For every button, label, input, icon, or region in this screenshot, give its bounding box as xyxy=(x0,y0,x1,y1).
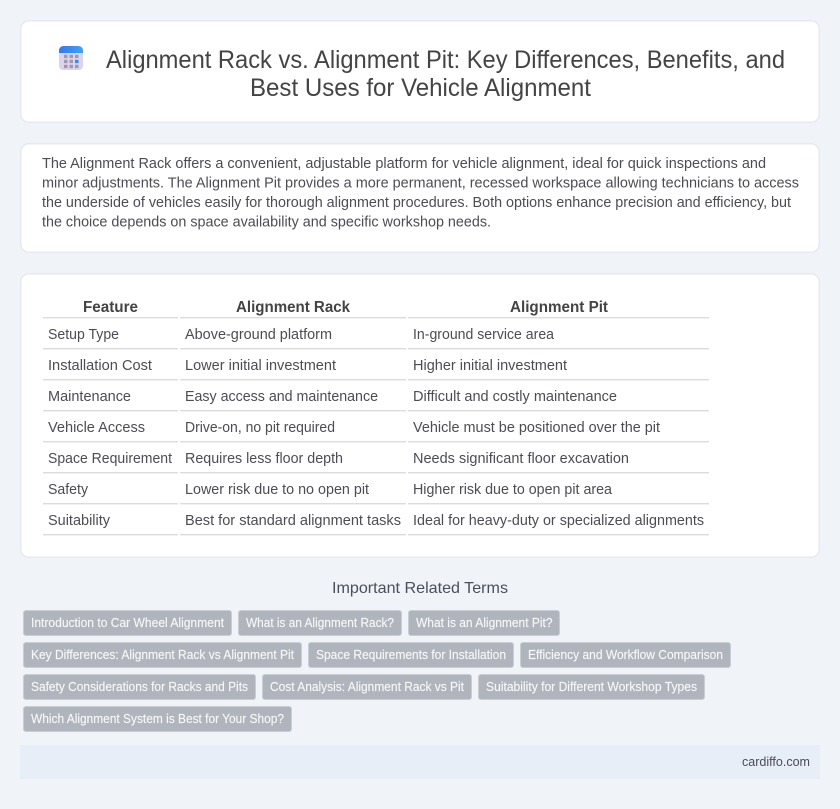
icon: calendar xyxy=(59,46,83,70)
tag xyxy=(520,642,730,668)
tag: Safety Considerations for Racks and Pits xyxy=(31,680,248,694)
row: vehicle access: Vehicle Access xyxy=(48,420,145,436)
row: space requirement: Needs significant floor excavation xyxy=(413,451,629,467)
title: Alignment Rack vs. Alignment Pit: Key Differences, Benefits, and xyxy=(106,46,785,74)
tag: Key Differences: Alignment Rack vs Alignment Pit xyxy=(31,648,295,662)
table header: Feature xyxy=(83,299,138,316)
tag: Which Alignment System is Best for Your Shop? xyxy=(31,712,284,726)
row: vehicle access: Vehicle must be positioned over the pit xyxy=(413,420,660,436)
tag: Cost Analysis: Alignment Rack vs Pit xyxy=(270,680,465,694)
row: maintenance: Difficult and costly maintenance xyxy=(413,389,617,405)
row: safety: Higher risk due to open pit area xyxy=(413,482,613,498)
panel: header xyxy=(21,21,819,122)
row: maintenance: Easy access and maintenance xyxy=(185,389,378,405)
table header: Alignment Rack xyxy=(236,299,350,316)
tag: What is an Alignment Pit? xyxy=(416,616,553,630)
row: setup type xyxy=(48,327,555,343)
tag xyxy=(24,706,292,732)
tag: What is an Alignment Rack? xyxy=(246,616,394,630)
row: safety xyxy=(48,482,613,498)
row: suitability xyxy=(48,513,704,529)
row: safety: Lower risk due to no open pit xyxy=(185,482,369,498)
panel: introduction text: the choice depends on space availability and specific workshop needs. xyxy=(42,214,491,230)
tag xyxy=(478,674,704,700)
row: installation cost xyxy=(48,358,567,374)
tag xyxy=(408,610,560,636)
tag xyxy=(24,610,232,636)
row: vehicle access xyxy=(48,420,660,436)
table header: Alignment Pit xyxy=(510,299,609,316)
panel: introduction text: The Alignment Rack offers a convenient, adjustable platform for vehicle alignment, ideal for quick inspections and xyxy=(42,156,766,172)
footer: cardiffo.com xyxy=(742,755,810,769)
title: Best Uses for Vehicle Alignment xyxy=(250,74,591,102)
row: space requirement: Requires less floor depth xyxy=(185,451,343,467)
row: setup type: Setup Type xyxy=(48,327,119,343)
tag xyxy=(238,610,402,636)
row: installation cost: Lower initial investment xyxy=(185,358,336,374)
tag xyxy=(262,674,472,700)
tag: Suitability for Different Workshop Types xyxy=(486,680,697,694)
row: setup type: In-ground service area xyxy=(413,327,555,343)
row: safety: Safety xyxy=(48,482,89,498)
row: suitability: Ideal for heavy-duty or specialized alignments xyxy=(413,513,704,529)
tag: Efficiency and Workflow Comparison xyxy=(528,648,723,662)
tag xyxy=(308,642,514,668)
table header xyxy=(83,299,609,316)
row: vehicle access: Drive-on, no pit required xyxy=(185,420,335,436)
row: installation cost: Installation Cost xyxy=(48,358,152,374)
row: suitability: Best for standard alignment tasks xyxy=(185,513,401,529)
row: setup type: Above-ground platform xyxy=(185,327,332,343)
panel: introduction text: the underside of vehicles easily for thorough alignment procedures. Both options enhance precision and efficiency, but xyxy=(42,195,791,211)
row: maintenance: Maintenance xyxy=(48,389,131,405)
panel: comparison table xyxy=(21,274,819,557)
panel: introduction text: minor adjustments. The Alignment Pit provides a more permanent, recessed workspace allowing technicians to access xyxy=(42,176,799,192)
title xyxy=(106,46,785,102)
panel: introduction text xyxy=(21,144,819,252)
footer xyxy=(20,745,820,779)
row: space requirement: Space Requirement xyxy=(48,451,172,467)
row: space requirement xyxy=(48,451,629,467)
heading: important related terms: Important Related Terms xyxy=(332,580,508,597)
row: suitability: Suitability xyxy=(48,513,111,529)
row: installation cost: Higher initial investment xyxy=(413,358,567,374)
related terms tags xyxy=(24,610,730,732)
row: maintenance xyxy=(48,389,617,405)
tag xyxy=(24,642,302,668)
tag: Introduction to Car Wheel Alignment xyxy=(31,616,225,630)
tag: Space Requirements for Installation xyxy=(316,648,506,662)
tag xyxy=(24,674,256,700)
